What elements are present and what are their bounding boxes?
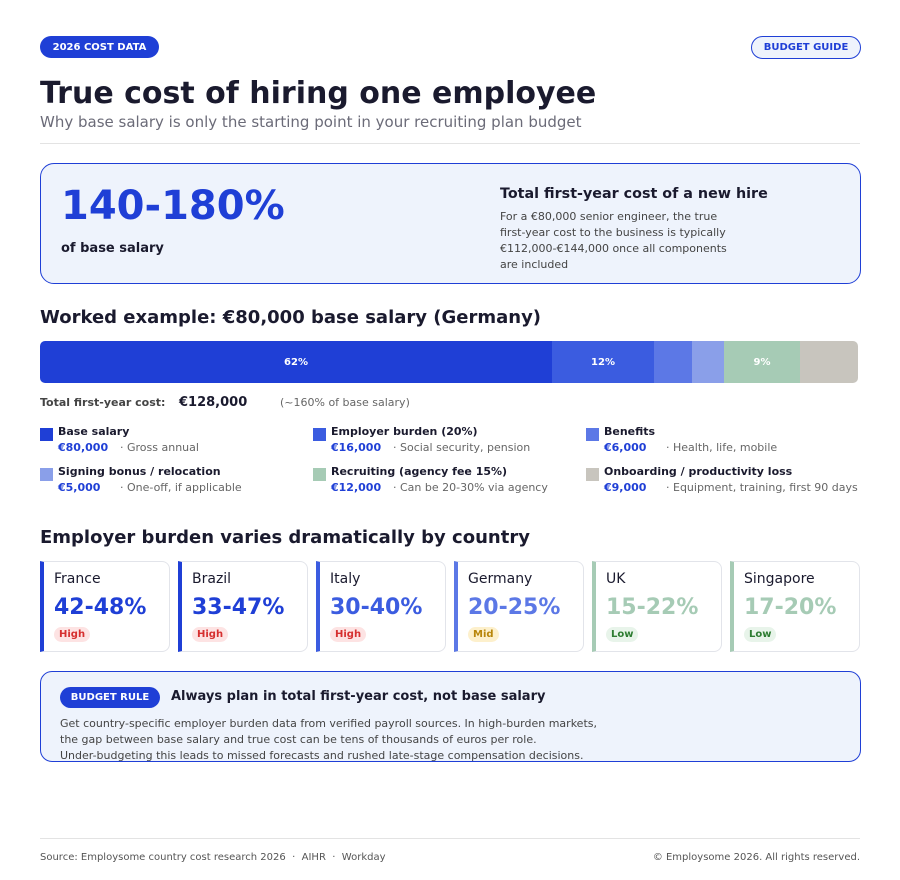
legend: €9,000: [604, 481, 646, 494]
stacked bar chart: 12%: [591, 356, 615, 368]
total cost line: €128,000: [179, 395, 247, 410]
card: France: High: [59, 629, 85, 640]
card: Germany: 20-25%: [468, 595, 560, 620]
footer: sources: Source: Employsome country cost research 2026 · AIHR · Workday: [40, 852, 386, 863]
legend: · Social security, pension: [393, 441, 530, 454]
rule heading: Always plan in total first-year cost, not base salary: [171, 689, 545, 704]
legend: · Health, life, mobile: [666, 441, 777, 454]
section heading: countries: Employer burden varies dramatically by country: [40, 527, 530, 548]
card: UK: Low: [611, 629, 633, 640]
legend: · Can be 20-30% via agency: [393, 481, 548, 494]
card: UK: [592, 561, 722, 652]
legend: €80,000: [58, 441, 108, 454]
legend: €16,000: [331, 441, 381, 454]
legend: [40, 425, 858, 494]
tag: budget guide: BUDGET GUIDE: [764, 42, 848, 53]
legend: €6,000: [604, 441, 646, 454]
legend: Recruiting (agency fee 15%): [331, 465, 507, 478]
legend: €5,000: [58, 481, 100, 494]
legend: Signing bonus / relocation: [58, 465, 221, 478]
legend: · Equipment, training, first 90 days: [666, 481, 858, 494]
card: France: France: [54, 571, 101, 587]
tag: 2026 cost data: [40, 36, 159, 58]
badge: budget rule: [60, 687, 160, 708]
big stat: 140-180%: [61, 183, 285, 229]
title: True cost of hiring one employee: [40, 76, 596, 111]
legend: · One-off, if applicable: [120, 481, 242, 494]
section heading: worked example: Worked example: €80,000 base salary (Germany): [40, 307, 541, 328]
subtitle: Why base salary is only the starting point in your recruiting plan budget: [40, 113, 582, 131]
rule body: [60, 717, 597, 762]
legend: · Gross annual: [120, 441, 199, 454]
card: France: [40, 561, 170, 652]
card: Singapore: [730, 561, 860, 652]
legend: Base salary: [58, 425, 129, 438]
hero body: For a €80,000 senior engineer, the true first-year cost to the business is typically €112,000-€144,000 once all components are included: [500, 210, 727, 271]
badge: budget rule: BUDGET RULE: [71, 692, 149, 703]
card: Italy: 30-40%: [330, 595, 422, 620]
card: Italy: Italy: [330, 571, 360, 587]
total cost line: [40, 395, 410, 410]
stacked bar chart: [40, 341, 858, 383]
card: Brazil: 33-47%: [192, 595, 284, 620]
footer: copyright: © Employsome 2026. All rights reserved.: [653, 852, 860, 863]
legend: Employer burden (20%): [331, 425, 478, 438]
rule body: Get country-specific employer burden data from verified payroll sources. In high-burden markets,: [60, 717, 597, 730]
card: Brazil: Brazil: [192, 571, 231, 587]
card: Germany: Germany: [468, 571, 532, 587]
card: Singapore: Singapore: [744, 571, 815, 587]
panel: budget rule: [40, 671, 861, 762]
legend: €12,000: [331, 481, 381, 494]
card: France: 42-48%: [54, 595, 146, 620]
card: Italy: [316, 561, 446, 652]
card: Singapore: Low: [749, 629, 771, 640]
total cost line: Total first-year cost:: [40, 396, 165, 409]
tag: budget guide: [751, 36, 861, 59]
stacked bar chart: 62%: [284, 356, 308, 368]
stacked bar chart: 9%: [754, 356, 770, 368]
legend: Onboarding / productivity loss: [604, 465, 792, 478]
card: UK: 15-22%: [606, 595, 698, 620]
tag: 2026 cost data: 2026 COST DATA: [53, 42, 146, 52]
card: Germany: [454, 561, 584, 652]
panel: hero stat: [40, 163, 861, 284]
legend: Benefits: [604, 425, 655, 438]
card: Brazil: [178, 561, 308, 652]
card: UK: UK: [606, 571, 625, 587]
card: Germany: Mid: [473, 629, 494, 640]
total cost line: (~160% of base salary): [280, 396, 410, 409]
rule body: the gap between base salary and true cost can be tens of thousands of euros per role.: [60, 733, 537, 746]
rule body: Under-budgeting this leads to missed forecasts and rushed late-stage compensation decisions.: [60, 749, 583, 762]
card: Singapore: 17-20%: [744, 595, 836, 620]
stat label: of base salary: [61, 241, 164, 256]
hero heading: Total first-year cost of a new hire: [500, 186, 768, 202]
card: Italy: High: [335, 629, 361, 640]
card: Brazil: High: [197, 629, 223, 640]
